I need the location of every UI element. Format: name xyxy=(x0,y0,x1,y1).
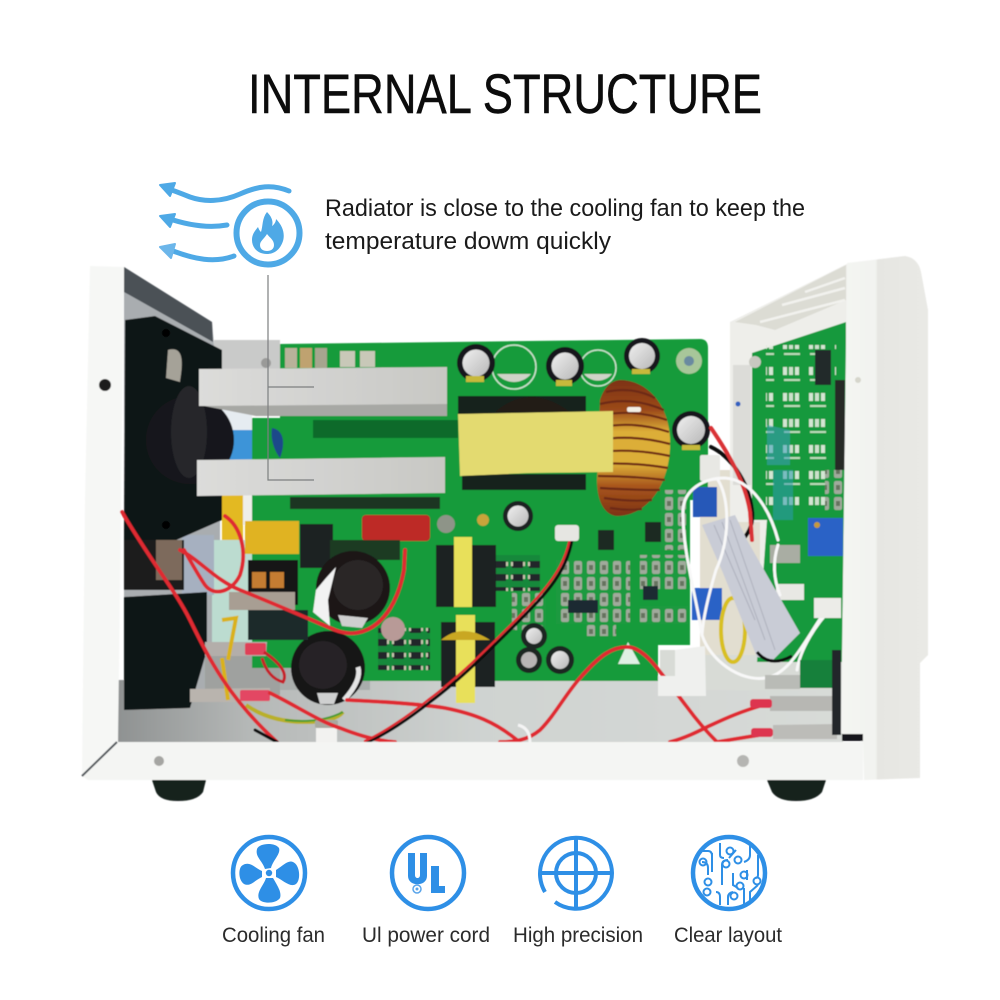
feature: cooling fan xyxy=(222,837,325,947)
chassis floor xyxy=(118,650,843,744)
red wiring xyxy=(122,512,773,742)
rear bracket xyxy=(658,646,706,696)
icon: crosshair xyxy=(540,837,612,909)
title: INTERNAL STRUCTURE xyxy=(248,62,762,125)
small connector xyxy=(555,525,579,541)
wall screw hole xyxy=(99,379,111,391)
yellow green loop xyxy=(721,598,745,662)
cooling fan xyxy=(124,316,234,545)
output board connector xyxy=(814,598,841,618)
power inlet xyxy=(124,540,207,710)
callout text xyxy=(325,195,805,255)
chassis edge and screws xyxy=(82,742,749,776)
icon: circuit traces xyxy=(693,837,765,909)
spade terminals left xyxy=(190,618,284,702)
icon: fan xyxy=(233,837,305,909)
feature: clear layout xyxy=(674,837,782,947)
white signal wires xyxy=(683,478,832,678)
left wall panel xyxy=(82,266,124,776)
icon: UL mark xyxy=(392,837,464,909)
bulk capacitors xyxy=(291,540,405,705)
inductors and driver transformers xyxy=(229,537,496,703)
callout text: temperature dowm quickly xyxy=(325,228,611,255)
pad clusters xyxy=(556,560,630,624)
earth wire and post xyxy=(246,705,343,744)
feature: high precision xyxy=(513,837,643,947)
spade terminals right xyxy=(750,650,841,739)
rubber feet xyxy=(152,780,826,801)
photo: open power supply interior xyxy=(82,256,928,801)
toroidal inductor xyxy=(597,380,670,516)
display board enclosure xyxy=(730,264,847,650)
label: Cooling fan xyxy=(222,924,325,947)
cable tie xyxy=(518,725,530,742)
feature: UL power cord xyxy=(362,837,490,947)
callout leader lines xyxy=(268,275,314,480)
electrolytic capacitors xyxy=(457,338,710,674)
label: Clear layout xyxy=(674,924,782,947)
ribbon cable xyxy=(700,455,800,661)
label: High precision xyxy=(513,924,643,947)
icon: heat radiating airflow xyxy=(160,183,300,264)
transformer core and winding xyxy=(458,396,613,490)
front chassis strip xyxy=(82,742,863,780)
power wires to output xyxy=(711,428,752,542)
callout text: Radiator is close to the cooling fan to keep the xyxy=(325,195,805,222)
red and black twin wire xyxy=(255,530,573,742)
front panel bezel xyxy=(841,256,928,780)
heat sink: lower xyxy=(197,457,445,496)
label: Ul power cord xyxy=(362,924,490,947)
cable bay behind wires xyxy=(700,470,760,655)
back wall and bracket xyxy=(124,267,280,695)
main green circuit board xyxy=(252,339,708,681)
display circuit board xyxy=(749,322,846,662)
red and yellow film capacitors xyxy=(245,515,455,568)
heat sink: upper xyxy=(199,367,447,416)
trimmer potentiometers xyxy=(692,487,843,620)
